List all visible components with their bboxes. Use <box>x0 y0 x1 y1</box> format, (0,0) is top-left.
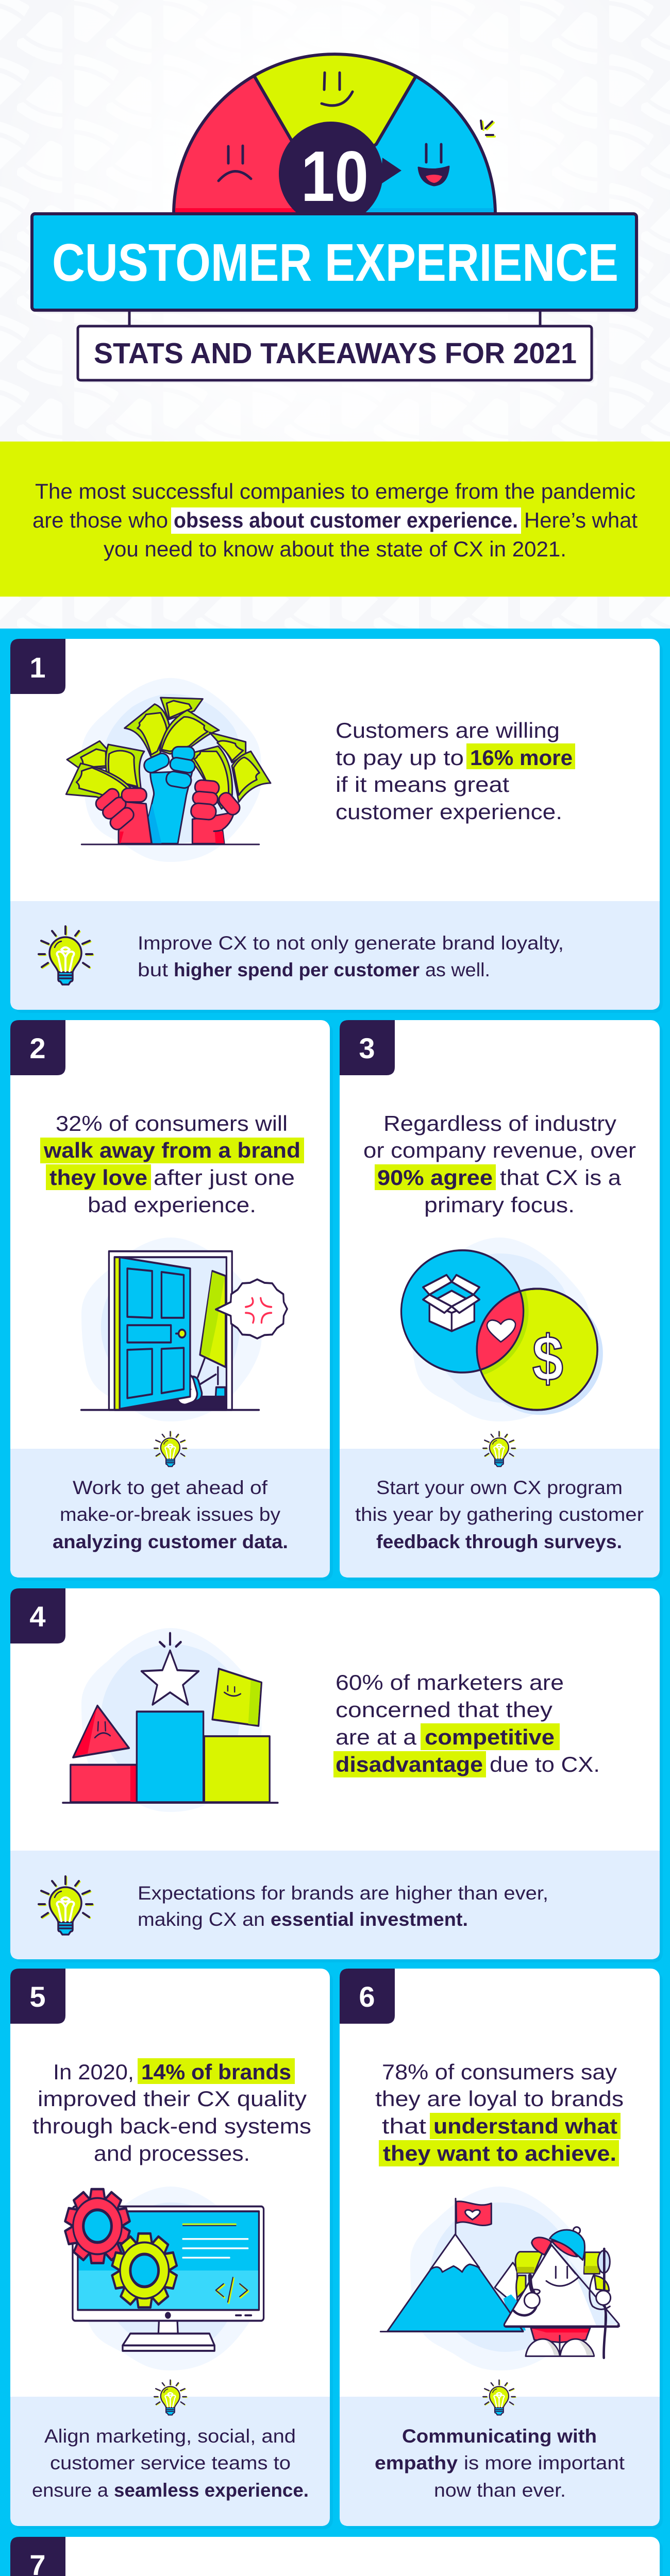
illustration: hiker and mountain <box>380 2187 619 2370</box>
stat text 5: through back-end systems <box>32 2114 311 2138</box>
stat text 5: improved their CX quality <box>38 2087 307 2111</box>
stat text 6: they want to achieve. <box>383 2141 616 2165</box>
takeaway text 2: Work to get ahead of <box>73 1477 268 1498</box>
stat text 6: 78% of consumers say <box>382 2060 617 2084</box>
takeaway text 1: as well. <box>425 959 490 980</box>
intro band: you need to know about the state of CX in 2021. <box>104 537 566 561</box>
stat text 1: to pay up to <box>336 745 464 770</box>
excited face <box>418 144 449 185</box>
number badge 2: 2 <box>29 1032 46 1064</box>
stat text 4: competitive <box>425 1725 555 1749</box>
stat text 2: bad experience. <box>88 1193 256 1217</box>
blue content panel <box>0 629 670 2576</box>
takeaway text 5 <box>32 2426 309 2501</box>
stat text 3: Regardless of industry <box>383 1111 616 1136</box>
takeaway text 5: Align marketing, social, and <box>44 2426 296 2447</box>
illustration: venn diagram <box>396 1238 603 1421</box>
intro band <box>0 442 670 597</box>
takeaway text 5: ensure a <box>32 2480 108 2501</box>
stat text 1: if it means great <box>336 772 509 796</box>
takeaway text 4: Expectations for brands are higher than ever, <box>138 1883 548 1904</box>
stat text 5 <box>32 2058 311 2165</box>
panel: stat 5 <box>10 1969 333 2529</box>
gauge lime segment <box>254 54 416 174</box>
stat text 5: In 2020, <box>53 2060 134 2084</box>
takeaway text 6: Communicating with <box>402 2426 597 2447</box>
icon: lightbulb <box>39 926 93 985</box>
panel: stat 7 <box>10 2537 663 2576</box>
stat text 6 <box>375 2060 624 2166</box>
takeaway text 4: making CX an <box>138 1909 265 1930</box>
panel: stat 2 <box>10 1020 333 1581</box>
takeaway text 4: essential investment. <box>271 1909 468 1930</box>
stat text 4: are at a <box>336 1725 417 1749</box>
panel: stat 3 <box>340 1020 663 1581</box>
stat text 1: 16% more <box>470 745 573 770</box>
stat text 5: and processes. <box>94 2141 250 2165</box>
stat text 2: 32% of consumers will <box>56 1111 288 1136</box>
number badge 5 <box>10 1969 65 2024</box>
subtitle sign: STATS AND TAKEAWAYS FOR 2021 <box>94 337 577 370</box>
intro band: The most successful companies to emerge from the pandemic <box>35 479 635 503</box>
title banner <box>32 214 639 313</box>
header background pattern <box>0 0 670 630</box>
stat text 4: 60% of marketers are <box>336 1670 564 1694</box>
stat text 3: or company revenue, over <box>363 1138 636 1162</box>
stat text 4: due to CX. <box>490 1752 600 1776</box>
stat text 1: Customers are willing <box>336 718 560 742</box>
takeaway text 2 <box>53 1477 288 1552</box>
takeaway text 6: now than ever. <box>434 2480 566 2501</box>
takeaway text 6: empathy <box>375 2452 458 2473</box>
stat text 4: concerned that they <box>336 1698 552 1722</box>
gauge blue segment <box>330 76 495 214</box>
number badge 6 <box>340 1969 395 2024</box>
gauge illustration <box>174 54 495 226</box>
icon: lightbulb <box>483 1432 515 1466</box>
stat text 6: that <box>382 2114 426 2138</box>
stat text 3: that CX is a <box>500 1165 622 1190</box>
takeaway text 2: analyzing customer data. <box>53 1531 288 1552</box>
takeaway text 3 <box>355 1477 644 1552</box>
takeaway text 1: but <box>138 959 169 980</box>
takeaway text 6: is more important <box>464 2452 625 2473</box>
number badge 1 <box>10 639 65 694</box>
sad face <box>219 146 251 181</box>
number 10 badge <box>279 122 401 226</box>
stat text 2: after just one <box>154 1165 295 1190</box>
number badge 4 <box>10 1588 65 1643</box>
sparkle <box>481 121 495 137</box>
takeaway text 5: seamless experience. <box>114 2480 309 2501</box>
stat text 2: walk away from a brand <box>43 1138 300 1162</box>
number badge 3 <box>340 1020 395 1075</box>
stat text 2: they love <box>49 1165 147 1190</box>
icon: lightbulb <box>154 1432 187 1466</box>
illustration: venn diagram: $ <box>532 1323 563 1394</box>
subtitle sign <box>78 310 594 383</box>
takeaway text 1 <box>138 933 564 980</box>
stat text 1 <box>336 718 575 824</box>
panel: stat 6 <box>340 1969 663 2529</box>
takeaway text 3: this year by gathering customer <box>355 1504 644 1525</box>
icon: lightbulb <box>154 2380 187 2415</box>
number badge 4: 4 <box>29 1600 46 1633</box>
illustration: podium <box>63 1628 278 1812</box>
number badge 2 <box>10 1020 65 1075</box>
stat text 4 <box>333 1670 600 1777</box>
takeaway text 3: feedback through surveys. <box>376 1531 622 1552</box>
panel: stat 1 <box>10 639 663 1013</box>
stat text 1: customer experience. <box>336 800 562 824</box>
icon: lightbulb <box>483 2380 515 2415</box>
takeaway text 1: higher spend per customer <box>174 959 420 980</box>
number 10 badge: 10 <box>301 137 368 216</box>
takeaway text 6 <box>375 2426 625 2501</box>
number badge 1: 1 <box>29 651 46 684</box>
panel: stat 4 <box>10 1588 663 1962</box>
intro band: obsess about customer experience. <box>174 508 518 532</box>
number badge 6: 6 <box>359 1980 375 2013</box>
stat text 5: 14% of brands <box>141 2060 291 2084</box>
illustration: monitor and gears <box>64 2187 264 2370</box>
number badge 3: 3 <box>359 1032 375 1064</box>
stat text 6: understand what <box>433 2114 617 2138</box>
neutral happy face <box>322 73 353 106</box>
illustration: customer walking out door <box>81 1238 287 1421</box>
takeaway text 4 <box>138 1883 548 1930</box>
stat text 3: 90% agree <box>377 1165 493 1190</box>
number badge 5: 5 <box>29 1980 46 2013</box>
stat text 4: disadvantage <box>336 1752 483 1776</box>
icon: lightbulb <box>39 1876 93 1935</box>
gauge red segment <box>174 76 331 214</box>
takeaway text 3: Start your own CX program <box>376 1477 623 1498</box>
intro band: Here’s what <box>524 508 638 532</box>
intro band: are those who <box>32 508 168 532</box>
takeaway text 1: Improve CX to not only generate brand loyalty, <box>138 933 564 954</box>
stat text 3 <box>363 1111 636 1217</box>
number badge 7 <box>10 2537 65 2576</box>
stat text 2 <box>40 1111 304 1217</box>
stat text 6: they are loyal to brands <box>375 2087 624 2111</box>
takeaway text 2: make-or-break issues by <box>60 1504 281 1525</box>
stat text 3: primary focus. <box>424 1193 575 1217</box>
illustration: hands holding money <box>66 678 271 862</box>
takeaway text 5: customer service teams to <box>50 2452 291 2473</box>
